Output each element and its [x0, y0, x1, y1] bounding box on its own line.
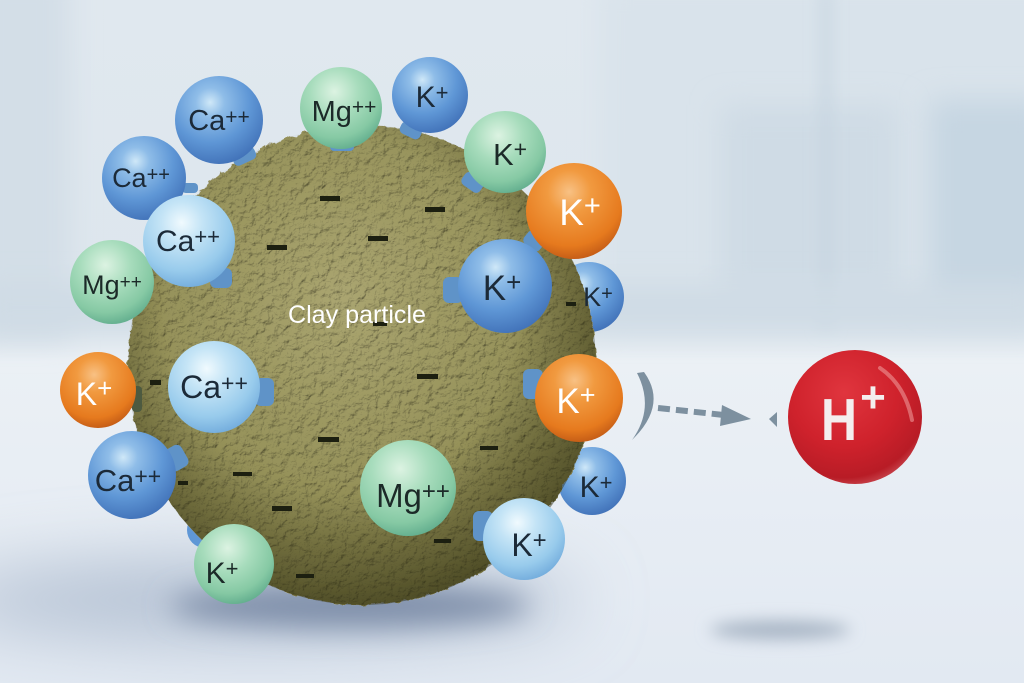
- ion: Mg++ bottom center: ++: [422, 478, 450, 505]
- ion: Mg++ top: ++: [352, 96, 376, 119]
- ion: Mg++ top: Mg: [312, 96, 352, 128]
- ion: Mg++ left: ++: [120, 272, 142, 293]
- ion: K+ top: [392, 57, 468, 133]
- ion: K+ blue right: K: [483, 269, 506, 308]
- ion: Mg++ left: [70, 240, 154, 324]
- ion: K+ green bottom: K: [206, 557, 226, 590]
- ion: K+ blue right: [458, 239, 552, 333]
- connectors: [132, 120, 547, 541]
- ion: H+ red: [788, 350, 922, 484]
- ion: K+ orange exchanging: [535, 354, 623, 442]
- ion: K+ green bottom: +: [226, 556, 238, 581]
- ion: K+ blue right: +: [506, 267, 521, 297]
- ion: K+ orange left: [60, 352, 136, 428]
- ion: Ca++ upper left: Ca: [112, 163, 147, 193]
- ion: Ca++ lower left: [88, 431, 176, 519]
- ion: K+ orange top right: [526, 163, 622, 259]
- ion: K+ light bottom right: K: [511, 527, 533, 563]
- ion: Ca++ top: ++: [225, 106, 250, 129]
- ion: K+ green bottom: [194, 524, 274, 604]
- ion: H+ red: H: [821, 387, 857, 453]
- ion: Ca++ light upper: Ca: [156, 225, 194, 258]
- ion: K+ orange top right: +: [584, 190, 601, 222]
- label: clay particle: Clay particle: [288, 301, 426, 329]
- ion: Ca++ upper left: ++: [147, 164, 170, 186]
- ion: Ca++ lower left: Ca: [95, 463, 134, 498]
- small arrowhead: [769, 412, 777, 427]
- label: K+ on lower right ion: K: [580, 471, 600, 504]
- ion: Ca++ light upper: [143, 195, 235, 287]
- ion: K+ top: +: [436, 80, 448, 105]
- ion: Mg++ top: [300, 67, 382, 149]
- ion: Ca++ upper left: [102, 136, 186, 220]
- ion: K+ light bottom right: [483, 498, 565, 580]
- ion: Ca++ light center: [168, 341, 260, 433]
- ion: K+ light behind particle: [558, 447, 626, 515]
- ion: K+ orange top right: K: [559, 192, 584, 233]
- clay particle: [128, 125, 596, 605]
- ion: Ca++ top: [175, 76, 263, 164]
- ion: K+ orange left: K: [76, 376, 97, 412]
- label: K+ on lower right ion: +: [600, 470, 612, 495]
- label: K+ on rear right ion: +: [601, 283, 613, 305]
- ion: H+ red: +: [860, 373, 886, 422]
- ion: Mg++ bottom center: [360, 440, 456, 536]
- ion: K+ green top: K: [493, 137, 514, 172]
- ion: Mg++ bottom center: Mg: [376, 477, 422, 514]
- ion: Mg++ left: Mg: [82, 270, 120, 300]
- ion: K+ green top: +: [514, 136, 527, 162]
- ion: K+ green top: [464, 111, 546, 193]
- ion: Ca++ top: Ca: [188, 105, 225, 137]
- charge marks: [150, 196, 576, 578]
- ion: K+ orange exchanging: +: [580, 380, 596, 410]
- ion sliver behind particle: [187, 512, 223, 548]
- ion: K+ blue behind particle: [554, 262, 624, 332]
- ion: K+ orange exchanging: K: [556, 382, 580, 421]
- ion: K+ orange left: +: [97, 373, 112, 403]
- ion: Ca++ light center: ++: [221, 370, 248, 396]
- ion: K+ light bottom right: +: [533, 527, 547, 554]
- exchange bracket: [632, 372, 654, 440]
- ion: K+ top: K: [416, 81, 436, 114]
- ion: Ca++ light upper: ++: [194, 224, 220, 249]
- label: K+ on rear right ion: K: [583, 282, 601, 312]
- ion: Ca++ light center: Ca: [180, 369, 221, 405]
- ion: Ca++ lower left: ++: [134, 463, 161, 489]
- dashed arrow: [658, 405, 751, 426]
